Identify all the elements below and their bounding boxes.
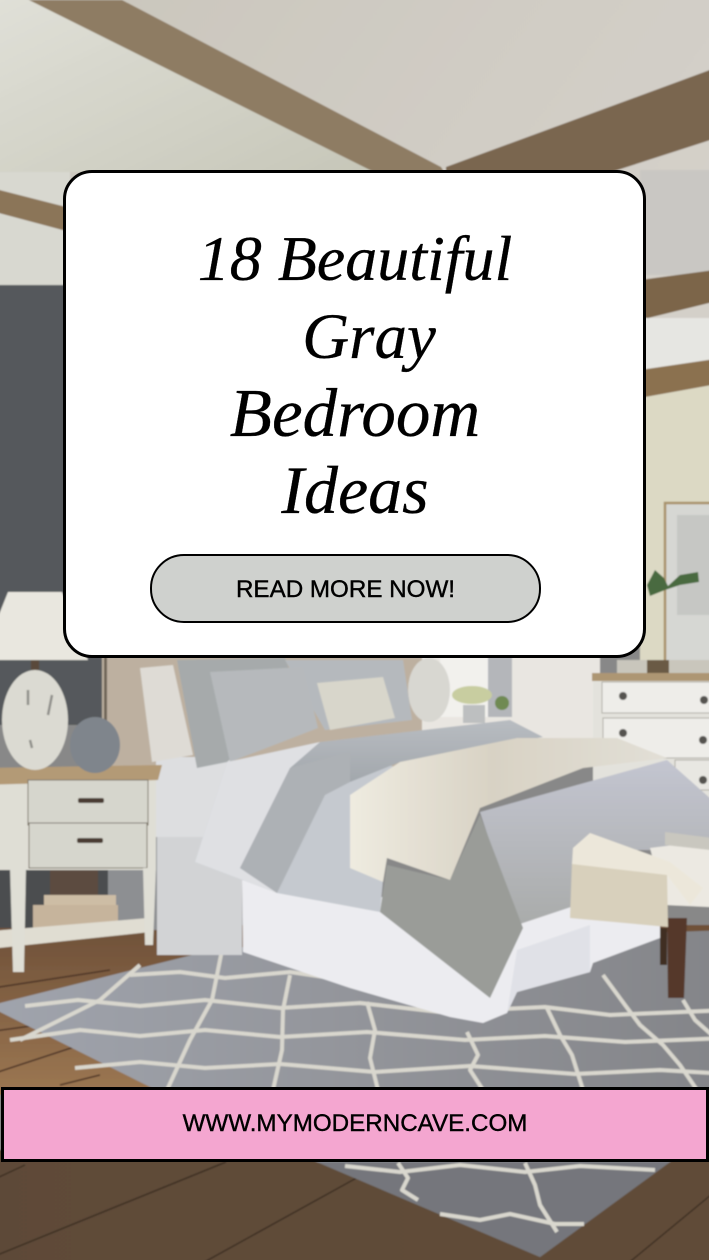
shelf items [617,660,709,674]
website band: WWW.MYMODERNCAVE.COM [183,1110,527,1137]
bed front skirt [242,860,660,1023]
gray vase [70,717,120,773]
duvet [195,720,709,998]
title line: Gray: Gray [302,301,436,373]
back vase [408,658,450,722]
title line: Ideas: Ideas [281,452,429,528]
floor lower [0,1150,709,1260]
title line: Bedroom: Bedroom [230,375,480,451]
nightstand [0,765,162,972]
right dresser [592,673,709,804]
rug [0,930,709,1257]
wooden beams [29,0,446,175]
bench with throw [570,832,709,998]
floor upper [0,925,709,1095]
title card [63,170,646,658]
plant [647,570,699,596]
ceiling and upper walls [0,0,709,400]
read more button: READ MORE NOW! [236,576,455,603]
website band [1,1087,709,1162]
bed side sheet and skirt [112,757,242,955]
headboard [102,657,422,767]
framed art [665,503,709,665]
walls [0,285,110,725]
flowers [452,686,509,723]
title line: 18 Beautiful: 18 Beautiful [198,223,512,294]
read more button [150,554,541,623]
pillows [140,658,412,768]
lamp [0,592,88,770]
